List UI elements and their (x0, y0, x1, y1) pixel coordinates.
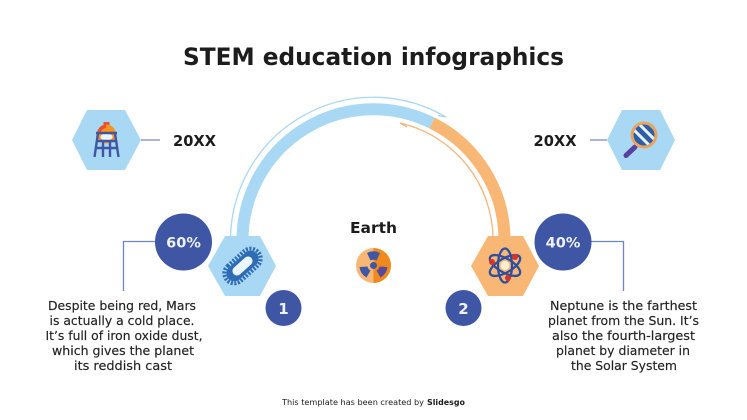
badge 60 percent: 60% (166, 236, 201, 252)
icon: flask on stand (94, 122, 118, 157)
infographic canvas (46, 46, 698, 406)
icon: atom (487, 248, 523, 282)
arch: blue and orange band (242, 109, 504, 238)
badge 40 percent (534, 214, 592, 270)
badge 40 percent: 40% (546, 236, 581, 252)
icon: bacteria (220, 245, 265, 287)
hexagon step 1 with bacteria icon (208, 236, 276, 296)
text block right: the Solar System (571, 359, 677, 373)
text block left: which gives the planet (52, 344, 194, 358)
text block right (548, 299, 699, 373)
connector 40 percent to text (590, 242, 624, 291)
connector right year (590, 139, 607, 141)
center label: Earth (350, 219, 397, 237)
title: STEM education infographics (183, 43, 564, 71)
number badge 2 (446, 290, 482, 326)
connector 60 percent to text (124, 242, 156, 291)
text block right: planet by diameter in (556, 344, 690, 358)
number badge 1: 1 (278, 300, 289, 318)
arrow: thin blue arc (230, 97, 446, 238)
text block left: is actually a cold place. (50, 314, 194, 328)
hexagon step 2 with atom icon (471, 236, 539, 296)
text block right: Neptune is the farthest (550, 299, 697, 313)
arrow: thin orange arc (400, 123, 493, 238)
top left hexagon with tower icon (72, 110, 141, 170)
footer credit: Slidesgo (427, 398, 465, 407)
text block right: planet from the Sun. It’s (548, 314, 699, 328)
text block right: also the fourth-largest (552, 329, 695, 343)
number badge 1 (266, 290, 302, 326)
number badge 2: 2 (458, 300, 469, 318)
icon: magnifying glass (624, 122, 658, 158)
text block left: its reddish cast (74, 359, 172, 373)
top right hexagon with magnifier (607, 110, 675, 170)
year label left: 20XX (173, 132, 216, 150)
text block left: It’s full of iron oxide dust, (46, 329, 202, 343)
year label right: 20XX (534, 132, 577, 150)
text block left: Despite being red, Mars (48, 299, 196, 313)
footer credit: This template has been created by (281, 398, 424, 407)
connector left year (141, 139, 160, 141)
badge 60 percent (155, 214, 212, 270)
text block left (46, 299, 202, 373)
icon: radiation symbol (356, 248, 391, 283)
